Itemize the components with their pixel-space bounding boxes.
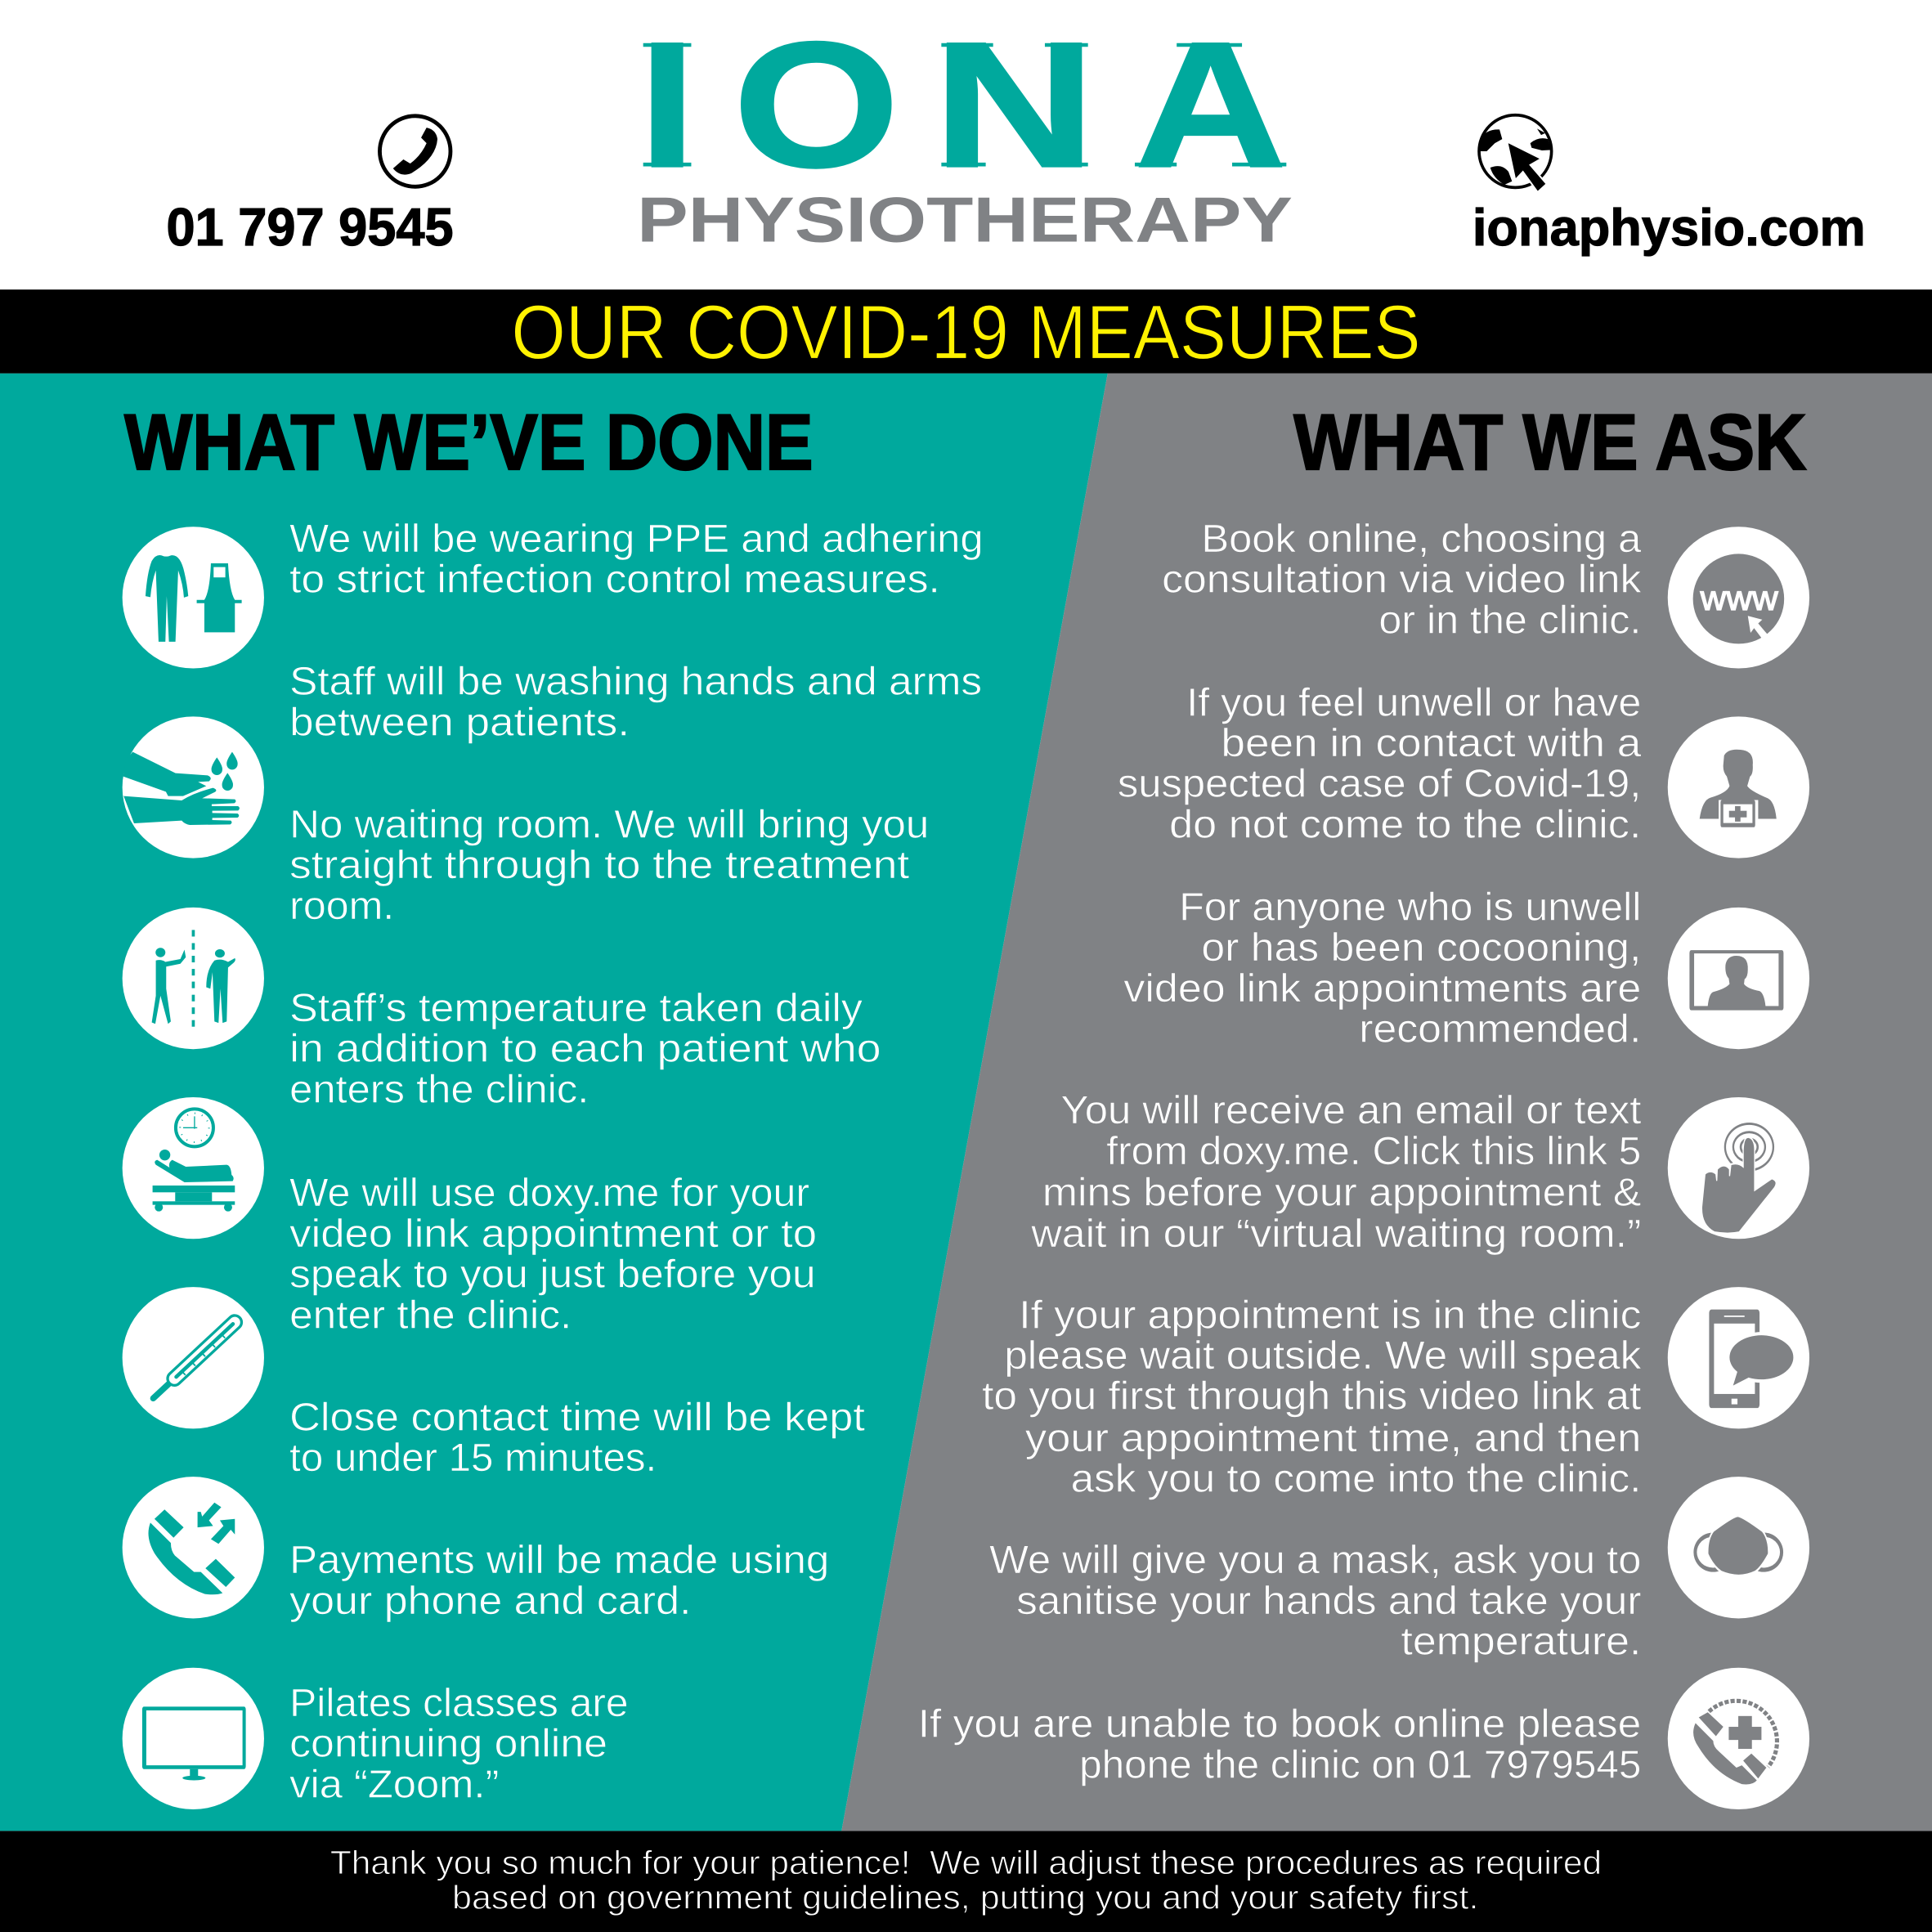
left text: contact time: to under 15 minutes.	[289, 1436, 657, 1480]
right text: phone clinic: phone the clinic on 01 7979545	[1079, 1742, 1641, 1786]
left text: doxy.me: We will use doxy.me for your	[289, 1171, 809, 1215]
left text: pilates: via “Zoom.”	[289, 1762, 499, 1806]
icon: video call	[1668, 908, 1809, 1049]
left text: doxy.me: enter the clinic.	[289, 1293, 572, 1337]
icon: phone with speech bubble	[1668, 1287, 1809, 1428]
icon: social distancing	[123, 908, 264, 1049]
right text: cocooning: For anyone who is unwell	[1179, 885, 1641, 929]
icon: monitor	[123, 1668, 264, 1809]
footer band	[0, 1831, 1932, 1932]
right text: email link: from doxy.me. Click this link 5	[1106, 1129, 1641, 1173]
logo: PHYSIOTHERAPY: PHYSIOTHERAPY	[637, 183, 1293, 255]
right text: phone clinic: If you are unable to book online please	[918, 1702, 1641, 1746]
icon: hand washing	[123, 716, 264, 858]
icon: globe with cursor	[1479, 115, 1552, 192]
right text: book online: consultation via video link	[1162, 558, 1642, 602]
right text: email link: mins before your appointment &	[1042, 1170, 1641, 1214]
icon: doctor	[1668, 716, 1809, 858]
left text: waiting room	[289, 802, 929, 928]
left text: waiting room: straight through to the treatment	[289, 843, 910, 887]
left text: pilates: continuing online	[289, 1722, 607, 1766]
left text: temperature: in addition to each patient who	[289, 1027, 881, 1071]
right text: unwell: been in contact with a	[1221, 721, 1642, 765]
left text: doxy.me: speak to you just before you	[289, 1253, 816, 1297]
title: OUR COVID-19 MEASURES	[511, 289, 1421, 375]
right text: phone clinic	[918, 1702, 1641, 1786]
right text: wait outside: to you first through this video link at	[982, 1374, 1642, 1419]
footer text	[330, 1844, 1602, 1916]
logo: IONA: A	[1135, 5, 1286, 204]
right text: wait outside: your appointment time, and then	[1025, 1416, 1641, 1460]
right text: mask	[989, 1538, 1641, 1664]
left text: PPE: We will be wearing PPE and adhering	[289, 517, 984, 561]
right text: unwell: If you feel unwell or have	[1186, 680, 1641, 724]
left text: pilates	[289, 1681, 629, 1806]
right text: mask: temperature.	[1401, 1620, 1641, 1664]
right text: wait outside: please wait outside. We will speak	[1004, 1334, 1642, 1378]
left text: contact time: Close contact time will be kept	[289, 1395, 866, 1439]
right text: cocooning	[1123, 885, 1641, 1051]
left text: temperature: Staff’s temperature taken daily	[289, 986, 863, 1030]
title band	[0, 289, 1932, 374]
icon: PPE suit and apron	[123, 527, 264, 669]
left text: payments	[289, 1538, 829, 1623]
right text: wait outside: If your appointment is in the clinic	[1019, 1293, 1641, 1337]
right text: cocooning: recommended.	[1359, 1007, 1641, 1051]
left text: waiting room: No waiting room. We will bring you	[289, 802, 929, 846]
footer text: based on government guidelines, putting you and your safety first.	[452, 1878, 1478, 1916]
icon: phone payment	[123, 1477, 264, 1618]
icon: face mask	[1668, 1477, 1809, 1618]
right text: email link: wait in our “virtual waiting room.”	[1030, 1212, 1641, 1256]
left text: doxy.me	[289, 1171, 817, 1337]
left text: PPE	[289, 517, 984, 602]
icon: thermometer	[123, 1287, 264, 1428]
icon: phone with medical cross	[1668, 1668, 1809, 1809]
heading: what we've done: WHAT WE’VE DONE	[124, 399, 814, 486]
panel: right grey background	[841, 374, 1932, 1831]
footer text: Thank you so much for your patience! We will adjust these procedures as required	[330, 1844, 1602, 1881]
phone number: 01 797 9545	[166, 197, 454, 257]
right text: mask: We will give you a mask, ask you to	[989, 1538, 1641, 1582]
heading: what we ask: WHAT WE ASK	[1293, 399, 1806, 486]
left text: contact time	[289, 1395, 866, 1480]
right text: email link	[1030, 1088, 1642, 1256]
right text: unwell: suspected case of Covid-19,	[1118, 762, 1641, 806]
right text: email link: You will receive an email or text	[1061, 1088, 1642, 1132]
left text: payments: Payments will be made using	[289, 1538, 829, 1582]
icon: telephone	[379, 116, 451, 186]
right text: book online: Book online, choosing a	[1201, 517, 1642, 561]
panel: left teal background	[0, 374, 1108, 1831]
right text: unwell	[1118, 680, 1642, 846]
right text: book online: or in the clinic.	[1378, 598, 1641, 642]
right text: cocooning: or has been cocooning,	[1201, 926, 1641, 970]
left text: temperature	[289, 986, 881, 1111]
right text: mask: sanitise your hands and take your	[1016, 1579, 1641, 1623]
logo: IONA	[639, 5, 1286, 204]
right text: cocooning: video link appointments are	[1123, 966, 1641, 1011]
right text: unwell: do not come to the clinic.	[1169, 802, 1641, 846]
left text: payments: your phone and card.	[289, 1579, 691, 1623]
left text: washing: between patients.	[289, 700, 630, 744]
website address: ionaphysio.com	[1473, 199, 1866, 257]
right text: wait outside: ask you to come into the clinic.	[1071, 1457, 1641, 1501]
icon: www	[1668, 527, 1809, 669]
icon: www: www	[1700, 579, 1778, 617]
left text: pilates: Pilates classes are	[289, 1681, 629, 1725]
left text: washing	[289, 660, 982, 744]
right text: wait outside	[982, 1293, 1642, 1501]
left text: washing: Staff will be washing hands and arms	[289, 660, 982, 704]
left text: PPE: to strict infection control measures.	[289, 558, 940, 602]
right text: book online	[1162, 517, 1642, 642]
icon: touch link	[1668, 1097, 1809, 1239]
logo: IONA: I	[639, 5, 696, 204]
left text: waiting room: room.	[289, 884, 394, 928]
logo: IONA: N	[933, 5, 1096, 204]
icon: treatment bed with clock	[123, 1097, 264, 1239]
logo: IONA: O	[733, 5, 899, 204]
left text: temperature: enters the clinic.	[289, 1067, 589, 1111]
left text: doxy.me: video link appointment or to	[289, 1212, 817, 1256]
